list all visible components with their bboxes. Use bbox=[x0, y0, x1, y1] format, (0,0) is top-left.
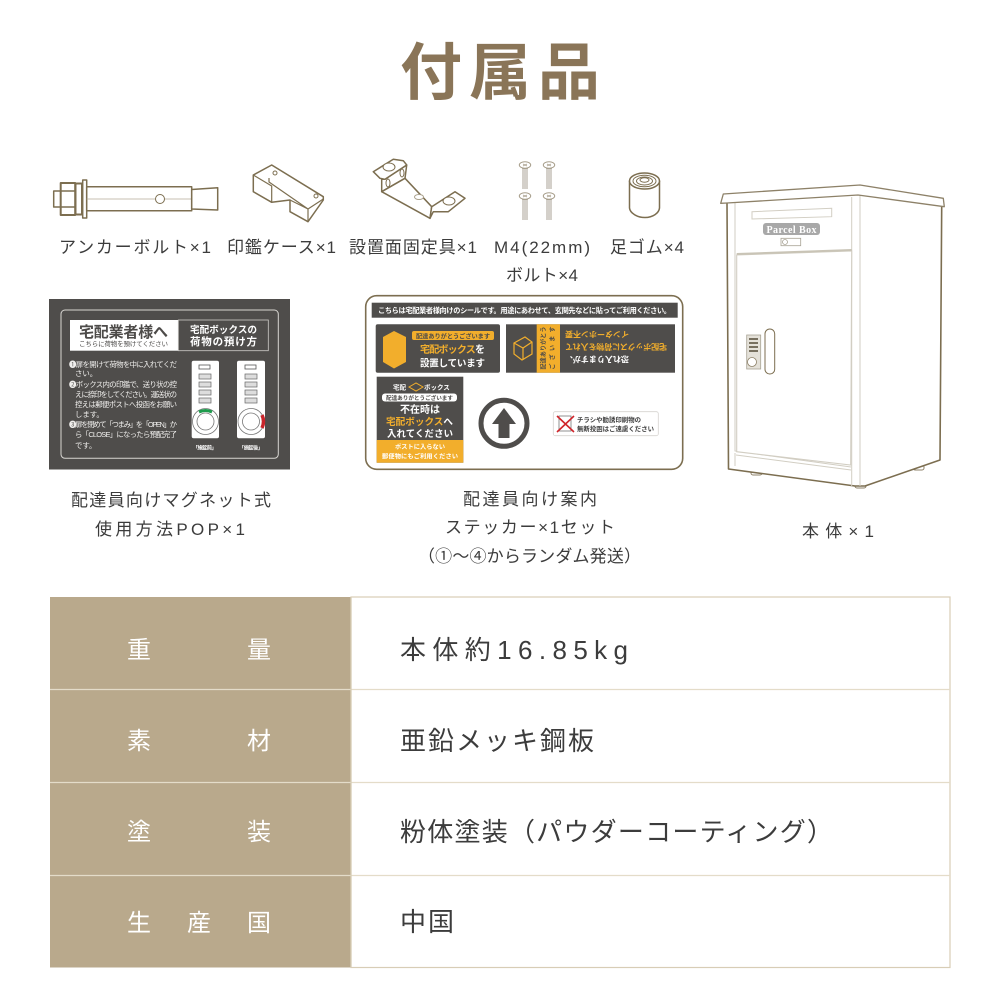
POP header: 宅配業者様へ bbox=[79, 323, 168, 341]
POP instructions: します。 bbox=[75, 410, 104, 419]
label: bolts bbox=[494, 238, 590, 285]
POP instructions bbox=[69, 360, 178, 450]
box small window bbox=[781, 238, 801, 246]
sticker 2 upside down: 配達ありがとう bbox=[540, 326, 548, 370]
label: stickers: 配達員向け案内 bbox=[463, 490, 597, 509]
table frame bbox=[50, 597, 950, 968]
icon: mounting bracket bbox=[373, 159, 465, 218]
panel: delivery stickers bbox=[366, 296, 683, 469]
icon: stamp case bbox=[253, 165, 323, 222]
row: weight: 重 bbox=[127, 637, 151, 664]
sticker 2 upside down: インターホン不要 bbox=[565, 330, 629, 340]
sticker 5: no flyers notice bbox=[553, 412, 658, 436]
box keypad bbox=[747, 335, 761, 369]
POP instructions: ❷ボックス内の印鑑で、送り状の控 bbox=[69, 380, 178, 389]
row: material: 亜鉛メッキ鋼板 bbox=[400, 726, 594, 756]
sticker 3: ボックス bbox=[424, 382, 450, 392]
row: weight: 量 bbox=[247, 637, 271, 664]
box body bbox=[727, 203, 942, 486]
label: stickers: ステッカー×1セット bbox=[445, 518, 615, 537]
row: country: 生 bbox=[127, 910, 151, 937]
sticker 2 upside down: 恐れ入りますが、 bbox=[565, 354, 629, 364]
box posts bbox=[735, 195, 860, 486]
spec table bbox=[50, 597, 950, 968]
icon: anchor bolt bbox=[54, 180, 218, 218]
POP lock after bbox=[237, 361, 265, 452]
label: stickers: （①～④からランダム発送） bbox=[418, 547, 641, 566]
label: POP: 使用方法POP×1 bbox=[95, 519, 245, 539]
icon: parcel box main unit bbox=[721, 185, 944, 488]
POP instructions: 控えは郵便ポストへ投函をお願い bbox=[75, 400, 177, 409]
box feet bbox=[751, 465, 924, 488]
row: coating: 粉体塗装（パウダーコーティング） bbox=[400, 817, 833, 847]
sticker 3: 郵便物にもご利用ください bbox=[382, 452, 458, 460]
POP header bbox=[70, 320, 268, 351]
row: country: 産 bbox=[187, 910, 211, 937]
POP header: 宅配ボックスの bbox=[190, 324, 257, 336]
label: rubber feet: 足ゴム×4 bbox=[610, 237, 684, 257]
sticker 1: 配達ありがとうございます bbox=[416, 332, 490, 340]
POP header: こちらに荷物を預けてください bbox=[79, 339, 168, 348]
icon: four screws bbox=[519, 162, 555, 220]
box handle bbox=[765, 329, 775, 374]
POP header: 荷物の預け方 bbox=[190, 335, 257, 348]
POP instructions: ❶扉を開けて荷物を中に入れてくだ bbox=[69, 360, 178, 369]
box door bbox=[737, 251, 852, 465]
sticker top strip: こちらは宅配業者様向けのシールです。用途にあわせて、玄関先などに貼ってご利用ください。 bbox=[378, 306, 671, 315]
sticker 3: 宅配ボックスへ bbox=[386, 416, 453, 428]
sticker 4: arrow circle bbox=[481, 400, 527, 446]
sticker 1: 設置しています bbox=[420, 358, 485, 370]
sticker top strip bbox=[372, 303, 678, 318]
POP instructions: えに捺印をしてください。運送状の bbox=[75, 390, 177, 399]
sticker 3: 入れてください bbox=[387, 428, 453, 439]
row: country bbox=[127, 907, 454, 937]
label: bolts: M4(22mm) bbox=[494, 238, 590, 257]
label: POP bbox=[71, 491, 271, 539]
sticker 3: 配達ありがとうございます bbox=[386, 394, 453, 402]
box name plate: Parcel Box bbox=[766, 225, 816, 236]
label: stickers bbox=[418, 490, 641, 566]
POP instructions: さい。 bbox=[75, 369, 97, 378]
sticker 3 bbox=[377, 377, 463, 463]
row: material: 素 bbox=[127, 728, 151, 755]
label: anchor bolt: アンカーボルト×1 bbox=[59, 238, 211, 257]
title: 付属品 bbox=[400, 39, 600, 108]
sticker 1 bbox=[376, 324, 500, 373]
label: main unit: 本体×1 bbox=[802, 522, 874, 541]
label: bolts: ボルト×4 bbox=[506, 266, 578, 285]
box roof bbox=[721, 185, 944, 207]
label: POP: 配達員向けマグネット式 bbox=[71, 491, 271, 510]
panel: magnetic POP bbox=[49, 299, 290, 470]
POP lock before: 「施錠前」 bbox=[193, 444, 217, 452]
sticker 1: 宅配ボックスを bbox=[420, 343, 485, 356]
sticker 2 upside down bbox=[506, 324, 675, 373]
sticker 3: 不在時は bbox=[400, 403, 440, 416]
row: coating: 装 bbox=[247, 819, 271, 846]
sticker 5: no flyers notice: 無断投函はご遠慮ください bbox=[577, 424, 655, 433]
row: material: 材 bbox=[247, 728, 271, 755]
row: country: 中国 bbox=[400, 907, 454, 937]
POP instructions: です。 bbox=[75, 441, 96, 450]
icon: rubber foot bbox=[630, 173, 660, 218]
sticker 3: 宅配 bbox=[393, 382, 406, 392]
row: material bbox=[127, 726, 594, 756]
label: stamp case: 印鑑ケース×1 bbox=[227, 238, 336, 257]
sticker 2 upside down: 宅配ボックスに荷物を入れて bbox=[565, 342, 667, 352]
row: coating bbox=[127, 817, 833, 847]
sticker 2 upside down: ございます bbox=[548, 326, 556, 370]
row: weight bbox=[127, 635, 628, 665]
POP lock after: 「施錠後」 bbox=[239, 444, 263, 452]
row: country: 国 bbox=[247, 910, 271, 937]
POP instructions: ❸扉を閉めて「つまみ」を「OPEN」か bbox=[69, 420, 178, 429]
POP instructions: ら「CLOSE」になったら預配完了 bbox=[75, 430, 177, 439]
POP lock before bbox=[192, 361, 219, 452]
box mail slot bbox=[752, 208, 832, 219]
sticker 5: no flyers notice: チラシや勧誘印刷物の bbox=[577, 415, 641, 424]
row: coating: 塗 bbox=[127, 819, 151, 846]
row: weight: 本体約16.85kg bbox=[400, 635, 628, 665]
label: mounting bracket: 設置面固定具×1 bbox=[349, 238, 477, 257]
sticker 3: ポストに入らない bbox=[395, 443, 445, 451]
